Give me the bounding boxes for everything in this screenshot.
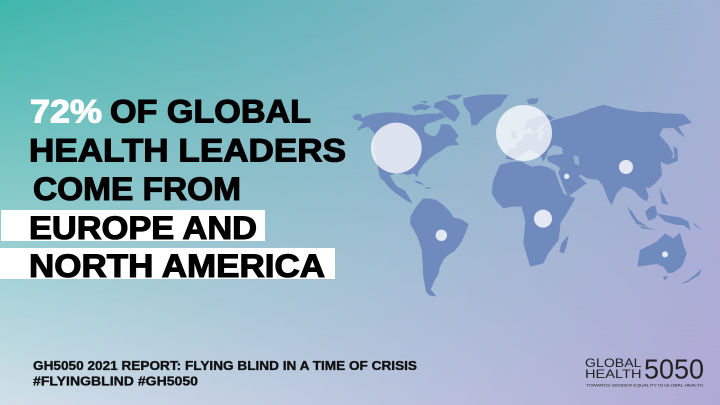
headline line 3: COME FROM [33,171,241,207]
headline line 2: HEALTH LEADERS [29,132,346,168]
oceania bubble [662,251,668,257]
footer report text [33,359,417,388]
highlight bar: europe and [1,210,265,241]
north america [353,112,459,203]
inland seas [538,131,579,165]
land masses [353,94,702,297]
headline line 1: OF GLOBAL [110,94,311,130]
scandinavia [523,115,554,133]
logo word global: GLOBAL [585,356,642,370]
japan [667,147,678,164]
south america bubble [436,230,447,241]
headline line 5: NORTH AMERICA [29,248,325,284]
africa [492,161,575,267]
logo tagline: TOWARDS GENDER EQUALITY IN GLOBAL HEALTH [586,384,704,388]
iceland [527,98,539,104]
asia bubble [619,160,633,174]
logo number 5050: 5050 [644,354,704,384]
tasmania [663,276,668,281]
caribbean [414,180,432,189]
australia [637,233,687,273]
headline [29,94,346,284]
headline line 4: EUROPE AND [29,210,257,246]
arctic islands [412,95,463,122]
middle east bubble [564,174,569,179]
hashtags: #FLYINGBLIND #GH5050 [33,374,198,388]
europe bubble [496,105,552,161]
africa bubble [534,210,552,228]
british isles [511,130,517,139]
logo word health: HEALTH [585,367,642,381]
headline line 1 percentage: 72% [30,94,102,130]
world map [353,94,702,297]
baja california [377,166,383,181]
iberia, europe and asia [506,105,692,205]
north america bubble [371,123,422,173]
southeast asia islands [627,187,702,231]
new zealand [680,268,702,284]
greenland [463,94,508,125]
south america [410,198,469,297]
logo: global health 5050 [585,354,704,388]
report title: GH5050 2021 REPORT: FLYING BLIND IN A TIME OF CRISIS [33,359,417,373]
madagascar [559,235,569,253]
highlight bar: north america [0,248,335,279]
